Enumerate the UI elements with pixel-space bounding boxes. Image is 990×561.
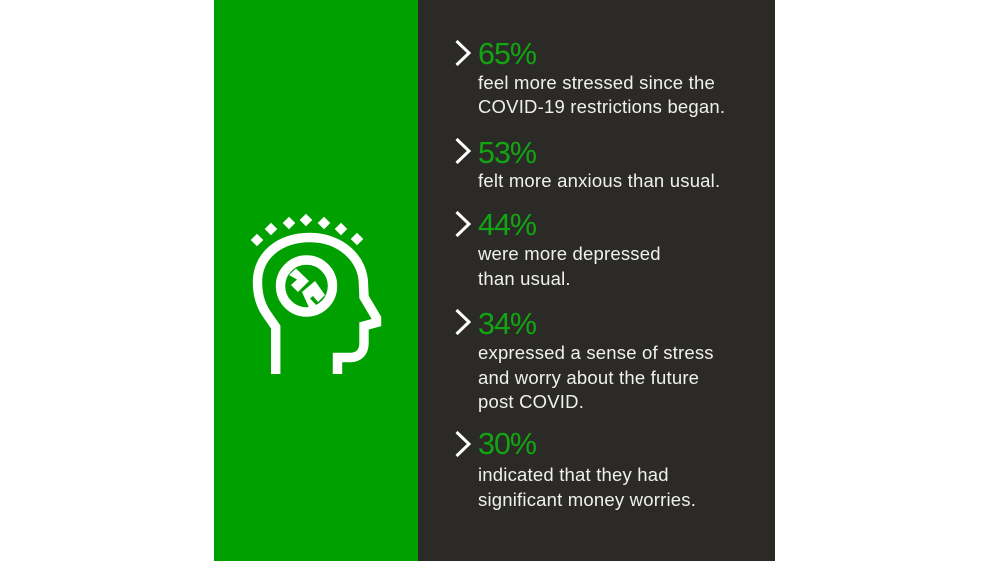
arrow (456, 430, 472, 458)
stat: 53% (456, 136, 720, 191)
stat: 34% (456, 307, 714, 412)
description (478, 342, 714, 412)
description: than usual. (478, 268, 571, 288)
percentage: 30% (478, 427, 536, 461)
description: post COVID. (478, 391, 584, 412)
percentage: 34% (478, 307, 536, 341)
percentage: 65% (478, 37, 536, 71)
description (478, 464, 696, 510)
description (478, 72, 725, 117)
arrow (456, 40, 472, 66)
description: significant money worries. (478, 489, 696, 510)
percentage: 53% (478, 136, 536, 170)
panel: green icon panel (214, 0, 418, 561)
arrow (456, 210, 472, 238)
description: expressed a sense of stress (478, 342, 714, 363)
stat: 44% (456, 208, 661, 288)
arrow (456, 138, 472, 164)
stat: 30% (456, 427, 696, 510)
description: were more depressed (478, 243, 661, 264)
description: feel more stressed since the (478, 72, 715, 93)
description: indicated that they had (478, 464, 669, 485)
description: and worry about the future (478, 366, 699, 388)
percentage: 44% (478, 208, 536, 242)
description: COVID-19 restrictions began. (478, 96, 725, 117)
description (478, 243, 661, 288)
description: felt more anxious than usual. (478, 170, 720, 191)
stat: 65% (456, 37, 725, 117)
panel: dark statistics panel (418, 0, 775, 561)
arrow (456, 308, 472, 336)
